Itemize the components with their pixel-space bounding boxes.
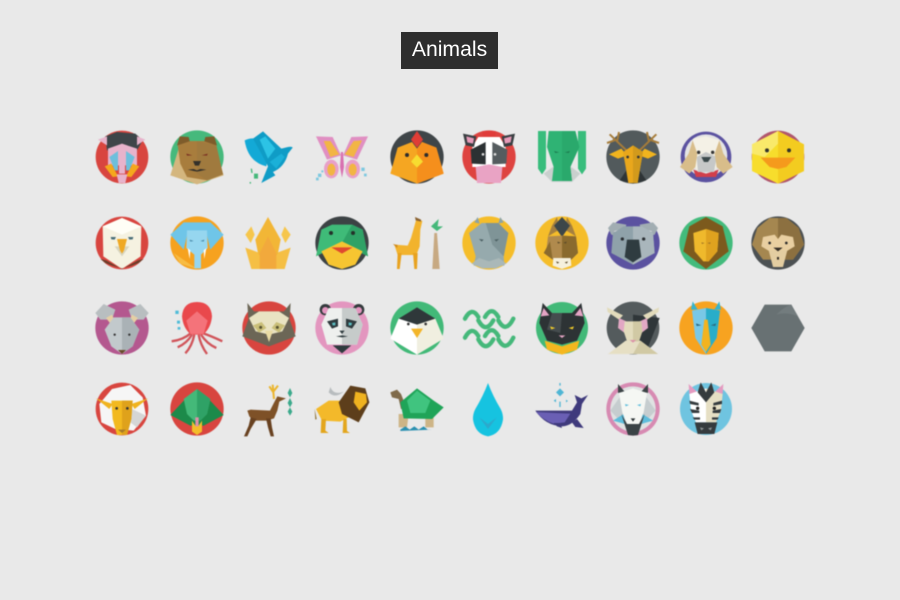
icon: parrot [315, 216, 369, 270]
icon: water drop [473, 383, 503, 436]
title [401, 32, 498, 69]
icon: giraffe [393, 217, 443, 269]
icon: black cat [536, 302, 588, 355]
icon: mouse [95, 301, 149, 355]
icon: wolf [606, 382, 660, 436]
icon: penguin [390, 301, 444, 355]
icon: hippo [462, 216, 516, 270]
icon: duck [752, 131, 804, 184]
icon: elephant [170, 216, 224, 270]
icon: waves [465, 311, 513, 346]
icon: dog [680, 132, 733, 182]
icon: eagle [96, 217, 148, 269]
icon: tortoise [390, 388, 444, 431]
icon: crown [245, 217, 291, 269]
icon: horse [535, 216, 589, 270]
icon: cow [462, 130, 516, 184]
icon: mandrill [96, 131, 148, 183]
title: Animals [412, 38, 487, 61]
icon: rooster [390, 130, 444, 184]
icon: deer full body [244, 385, 292, 436]
icon: panda [315, 301, 369, 355]
icon: lion face [679, 216, 733, 270]
icon: koala [606, 216, 660, 270]
icon: green horse [538, 131, 586, 182]
icon: rabbit [607, 302, 660, 354]
icon: butterfly [316, 136, 368, 180]
icon: bear [170, 130, 224, 184]
icon: whale [535, 383, 588, 428]
icon: deer head [606, 130, 660, 184]
icon: dove [245, 131, 293, 184]
icon: zebra [680, 382, 732, 435]
icon: hexagon [751, 305, 805, 351]
icon: snake [170, 382, 224, 436]
icon: monkey [751, 216, 805, 270]
icon: lion full body [315, 386, 369, 433]
icon: owl [242, 301, 296, 355]
icon: sheep [96, 383, 148, 435]
icon: octopus [172, 302, 222, 354]
icon: rhino [679, 301, 733, 355]
